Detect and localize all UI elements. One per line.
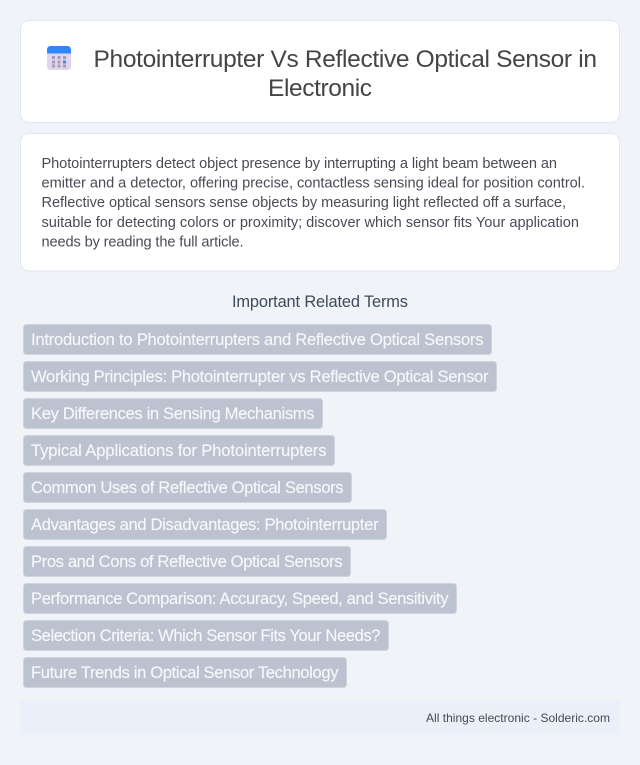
tag 2	[24, 362, 496, 392]
tag 2: Working Principles: Photointerrupter vs Reflective Optical Sensor	[31, 367, 489, 386]
tag 10	[24, 658, 346, 688]
tag 10: Future Trends in Optical Sensor Technology	[31, 663, 339, 682]
footer: All things electronic - Solderic.com	[426, 711, 610, 725]
text block: summary paragraph: suitable for detecting colors or proximity; discover which sensor fits Your application	[42, 215, 579, 231]
tag 4: Typical Applications for Photointerrupters	[31, 441, 326, 460]
tag 7	[24, 546, 350, 576]
text block: summary paragraph: Photointerrupters detect object presence by interrupting a light beam between an	[42, 156, 557, 172]
text block: summary paragraph: emitter and a detector, offering precise, contactless sensing ideal for position control.	[42, 176, 585, 192]
tag 8: Performance Comparison: Accuracy, Speed, and Sensitivity	[31, 589, 449, 608]
title: Photointerrupter Vs Reflective Optical Sensor in	[94, 46, 597, 73]
tag 3: Key Differences in Sensing Mechanisms	[31, 404, 314, 423]
tag 1	[24, 324, 492, 354]
tag 6: Advantages and Disadvantages: Photointerrupter	[31, 515, 379, 534]
icon: calendar	[47, 46, 71, 70]
tag 7: Pros and Cons of Reflective Optical Sensors	[31, 552, 342, 571]
tag 4	[24, 436, 334, 466]
tag 3	[24, 398, 322, 428]
list: related term tags	[24, 324, 496, 688]
panel: title card	[20, 20, 620, 122]
tag 9	[24, 620, 388, 650]
text block: summary paragraph	[42, 156, 585, 250]
heading: important related terms: Important Related Terms	[232, 293, 408, 311]
tag 9: Selection Criteria: Which Sensor Fits Your Needs?	[31, 626, 380, 645]
tag 5	[24, 472, 352, 502]
text block: summary paragraph: Reflective optical sensors sense objects by measuring light reflected off a surface,	[42, 195, 566, 211]
tag 5: Common Uses of Reflective Optical Sensors	[31, 478, 344, 497]
title: Electronic	[268, 75, 372, 102]
tag 8	[24, 584, 456, 614]
tag 1: Introduction to Photointerrupters and Reflective Optical Sensors	[31, 330, 484, 349]
panel: summary	[20, 134, 620, 271]
tag 6	[24, 510, 386, 540]
text block: summary paragraph: needs by reading the full article.	[42, 234, 244, 250]
title	[94, 46, 597, 102]
footer	[20, 701, 620, 735]
